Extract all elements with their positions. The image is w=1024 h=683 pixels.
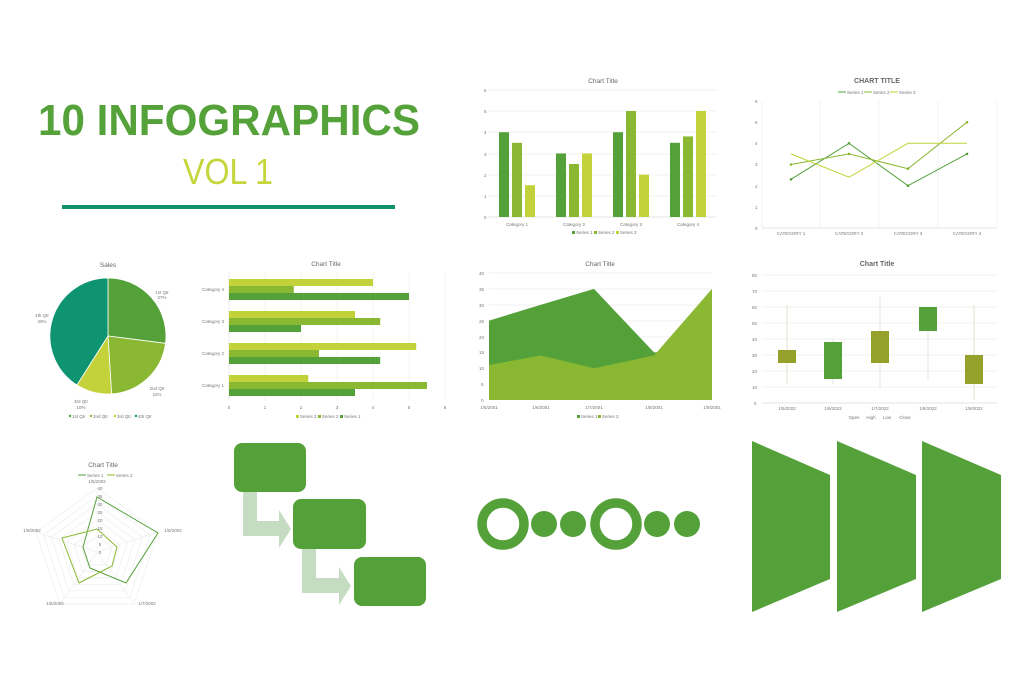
trapezoid steps — [752, 441, 1001, 612]
chart: candlestick: 10 — [752, 385, 758, 390]
box 1 — [234, 443, 306, 492]
chart: area: 1/8/2001 — [645, 405, 663, 410]
chart: clustered column: 2 — [484, 173, 487, 178]
chart: candlestick: 60 — [752, 305, 758, 310]
process flow — [234, 443, 426, 606]
chart: pie sales: 22% — [152, 392, 162, 397]
chart: radar: 1/9/2002 — [23, 528, 41, 533]
chart: candlestick: Close — [899, 415, 911, 420]
chart: clustered column: Category 3 — [620, 222, 643, 227]
chart: line: CATEGORY 3 — [894, 231, 923, 236]
chart: horizontal bars: 5 — [408, 405, 411, 410]
chart: area: Chart Title — [585, 261, 615, 268]
chart: horizontal bars: Series 2 — [322, 414, 339, 419]
title: 10 INFOGRAPHICS — [38, 96, 420, 145]
chart: radar: 1/6/2002 — [164, 528, 182, 533]
chart: candlestick: Low — [883, 415, 892, 420]
chart: pie sales: 27% — [157, 295, 167, 300]
chart: radar: 20 — [97, 518, 103, 523]
chart: horizontal bars: 0 — [228, 405, 231, 410]
chart: clustered column: Series 2 — [598, 230, 615, 235]
chart: horizontal bars: Category 1 — [202, 383, 224, 388]
title underline — [62, 205, 395, 209]
chart: candlestick: 0 — [754, 401, 757, 406]
chart: line: 4 — [755, 141, 758, 146]
chart: horizontal bars: 2 — [300, 405, 303, 410]
chart: area: Series 2 — [602, 414, 619, 419]
chart: radar: 1/5/2002 — [88, 479, 106, 484]
chart: clustered column: 4 — [484, 130, 487, 135]
chart: clustered column: Category 4 — [677, 222, 700, 227]
chart: candlestick: 30 — [752, 353, 758, 358]
chart: candlestick: High — [866, 415, 876, 420]
chart: candlestick: Open — [848, 415, 860, 420]
chart: clustered column: 6 — [484, 88, 487, 93]
chart: line: Series 3 — [899, 90, 916, 95]
chart: horizontal bars: Category 4 — [202, 287, 224, 292]
chart: pie sales: 10% — [76, 405, 86, 410]
chart: area: 15 — [479, 350, 485, 355]
chart: line: CHART TITLE — [854, 78, 900, 85]
chart: pie sales: Sales — [100, 262, 117, 269]
chart: area: 5 — [481, 382, 484, 387]
chart: line — [755, 78, 997, 236]
chart: candlestick: 1/5/2022 — [778, 406, 796, 411]
chart: radar — [23, 462, 182, 606]
chart: clustered column: 0 — [484, 215, 487, 220]
chart: candlestick: 40 — [752, 337, 758, 342]
rings and dots — [482, 503, 700, 545]
chart: area: 20 — [479, 335, 485, 340]
chart: line: 1 — [755, 205, 758, 210]
chart: area: 30 — [479, 303, 485, 308]
chart: line: CATEGORY 1 — [777, 231, 806, 236]
chart: line: CATEGORY 2 — [835, 231, 864, 236]
chart: line: 3 — [755, 162, 758, 167]
chart: horizontal bars: 1 — [264, 405, 267, 410]
chart: radar: Series 2 — [116, 473, 133, 478]
chart: line: 6 — [755, 99, 758, 104]
chart: line: 2 — [755, 184, 758, 189]
chart: candlestick: 1/6/2022 — [824, 406, 842, 411]
chart: pie sales: 4th Qtr — [35, 313, 49, 318]
chart: horizontal bars: 6 — [444, 405, 447, 410]
chart: horizontal bars — [202, 261, 447, 419]
chart: horizontal bars: 3 — [336, 405, 339, 410]
chart: area: 35 — [479, 287, 485, 292]
chart: pie sales: 3rd Qtr — [74, 399, 88, 404]
chart: radar: 0 — [99, 550, 102, 555]
chart: area — [479, 261, 721, 419]
chart: candlestick: 1/8/2022 — [919, 406, 937, 411]
chart: pie sales: 40% — [37, 319, 47, 324]
chart: area: 0 — [481, 398, 484, 403]
chart: clustered column: Category 2 — [563, 222, 586, 227]
chart: clustered column: Series 3 — [620, 230, 637, 235]
title — [38, 96, 420, 192]
chart: pie sales: 2nd Qtr — [93, 414, 109, 419]
chart: radar: 35 — [97, 494, 103, 499]
chart: candlestick: Chart Title — [860, 261, 894, 268]
chart: clustered column: Series 1 — [576, 230, 593, 235]
chart: clustered column: 5 — [484, 109, 487, 114]
chart: clustered column: Chart Title — [588, 78, 618, 85]
arrow 2 — [302, 549, 351, 605]
chart: horizontal bars: 4 — [372, 405, 375, 410]
chart: pie sales: 4th Qtr — [138, 414, 152, 419]
chart: clustered column: 1 — [484, 194, 487, 199]
chart: line: CATEGORY 4 — [953, 231, 982, 236]
chart: horizontal bars: Series 3 — [300, 414, 317, 419]
chart: horizontal bars: Category 2 — [202, 351, 224, 356]
chart: area: 25 — [479, 319, 485, 324]
box 2 — [293, 499, 366, 549]
chart: candlestick: 1/7/2022 — [871, 406, 889, 411]
chart: area: 1/6/2001 — [532, 405, 550, 410]
chart: radar: 30 — [97, 502, 103, 507]
chart: radar: 25 — [97, 510, 103, 515]
chart: line: 0 — [755, 226, 758, 231]
chart: pie sales: 3rd Qtr — [117, 414, 132, 419]
chart: line: Series 1 — [847, 90, 864, 95]
chart: area: 1/5/2001 — [480, 405, 498, 410]
chart: clustered column: Category 1 — [506, 222, 529, 227]
chart: pie sales: 1st Qtr — [155, 290, 169, 295]
subtitle: VOL 1 — [183, 151, 273, 192]
box 3 — [354, 557, 426, 606]
chart: area: 40 — [479, 271, 485, 276]
chart: candlestick: 1/9/2022 — [965, 406, 983, 411]
chart: line: 5 — [755, 120, 758, 125]
chart: candlestick — [752, 261, 997, 420]
chart: area: 10 — [479, 366, 485, 371]
chart: candlestick: 50 — [752, 321, 758, 326]
chart: clustered column: 3 — [484, 152, 487, 157]
chart: radar: 1/8/2002 — [46, 601, 64, 606]
chart: pie sales: 2nd Qtr — [149, 386, 165, 391]
chart: radar: 5 — [99, 542, 102, 547]
chart: area: Series 1 — [581, 414, 598, 419]
chart: line: Series 2 — [873, 90, 890, 95]
chart: candlestick: 70 — [752, 289, 758, 294]
chart: radar: Chart Title — [88, 462, 118, 469]
chart: radar: 10 — [97, 534, 103, 539]
chart: radar: 1/7/2002 — [138, 601, 156, 606]
chart: radar: Series 1 — [87, 473, 104, 478]
chart: horizontal bars: Series 1 — [344, 414, 361, 419]
chart: pie sales — [35, 262, 169, 419]
chart: candlestick: 80 — [752, 273, 758, 278]
chart: radar: 15 — [97, 526, 103, 531]
chart: pie sales: 1st Qtr — [72, 414, 86, 419]
chart: clustered column — [484, 78, 716, 235]
chart: area: 1/7/2001 — [585, 405, 603, 410]
chart: area: 1/9/2001 — [703, 405, 721, 410]
chart: horizontal bars: Category 3 — [202, 319, 224, 324]
arrow 1 — [243, 492, 291, 548]
chart: candlestick: 20 — [752, 369, 758, 374]
chart: radar: 40 — [97, 486, 103, 491]
chart: horizontal bars: Chart Title — [311, 261, 341, 268]
